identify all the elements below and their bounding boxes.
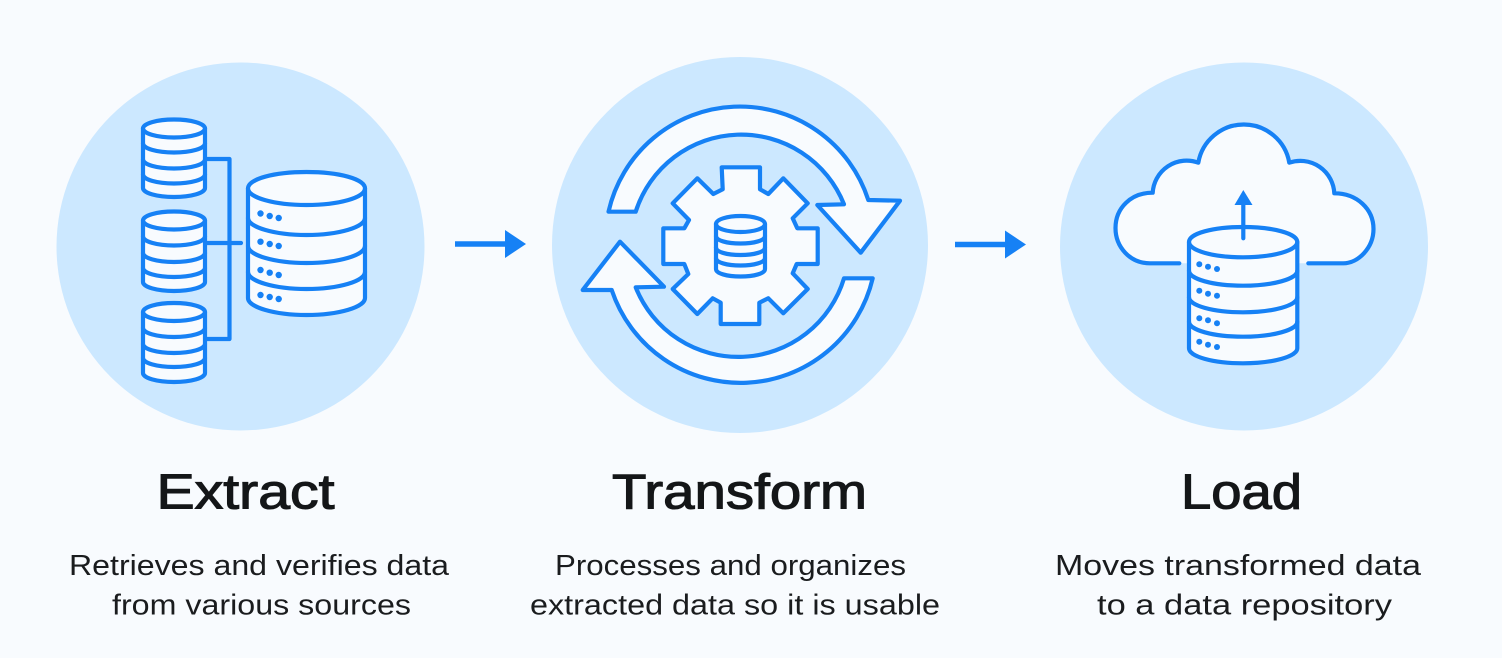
text: load description [1055,550,1422,622]
panel: extract [56,62,450,622]
arrow: transform to load [955,230,1026,258]
panel: load [1055,62,1428,622]
heading: Transform: Transform [612,466,867,520]
icon: small database middle [143,212,205,291]
icon: upload arrow [1234,190,1252,238]
icon: source databases with connector [143,120,365,382]
icon: gear database [716,216,765,276]
panel: transform [530,57,940,622]
text: extract description: Retrieves and verifies data [69,550,450,582]
heading: Load: Load [1181,466,1302,520]
icon: load database [1189,227,1297,363]
text: extract description [69,550,450,622]
icon: upper cycle arrow [608,107,900,253]
icon: small database bottom [143,303,205,382]
text: transform description: Processes and organizes [555,550,906,582]
text: extract description: from various sources [112,590,411,622]
text: transform description: extracted data so it is usable [530,590,940,622]
icon: gear [663,167,818,324]
icon: small database top [143,120,205,197]
icon: cloud [1116,125,1374,263]
heading: Extract: Extract [156,466,335,520]
transform background circle [552,57,928,433]
text: transform description [530,550,940,622]
load background circle [1060,62,1428,430]
text: load description: Moves transformed data [1055,550,1422,582]
text: load description: to a data repository [1097,590,1393,622]
icon: large database [248,172,365,315]
arrow: extract to transform [455,230,526,258]
icon: lower cycle arrow [583,242,873,383]
extract background circle [56,62,424,430]
